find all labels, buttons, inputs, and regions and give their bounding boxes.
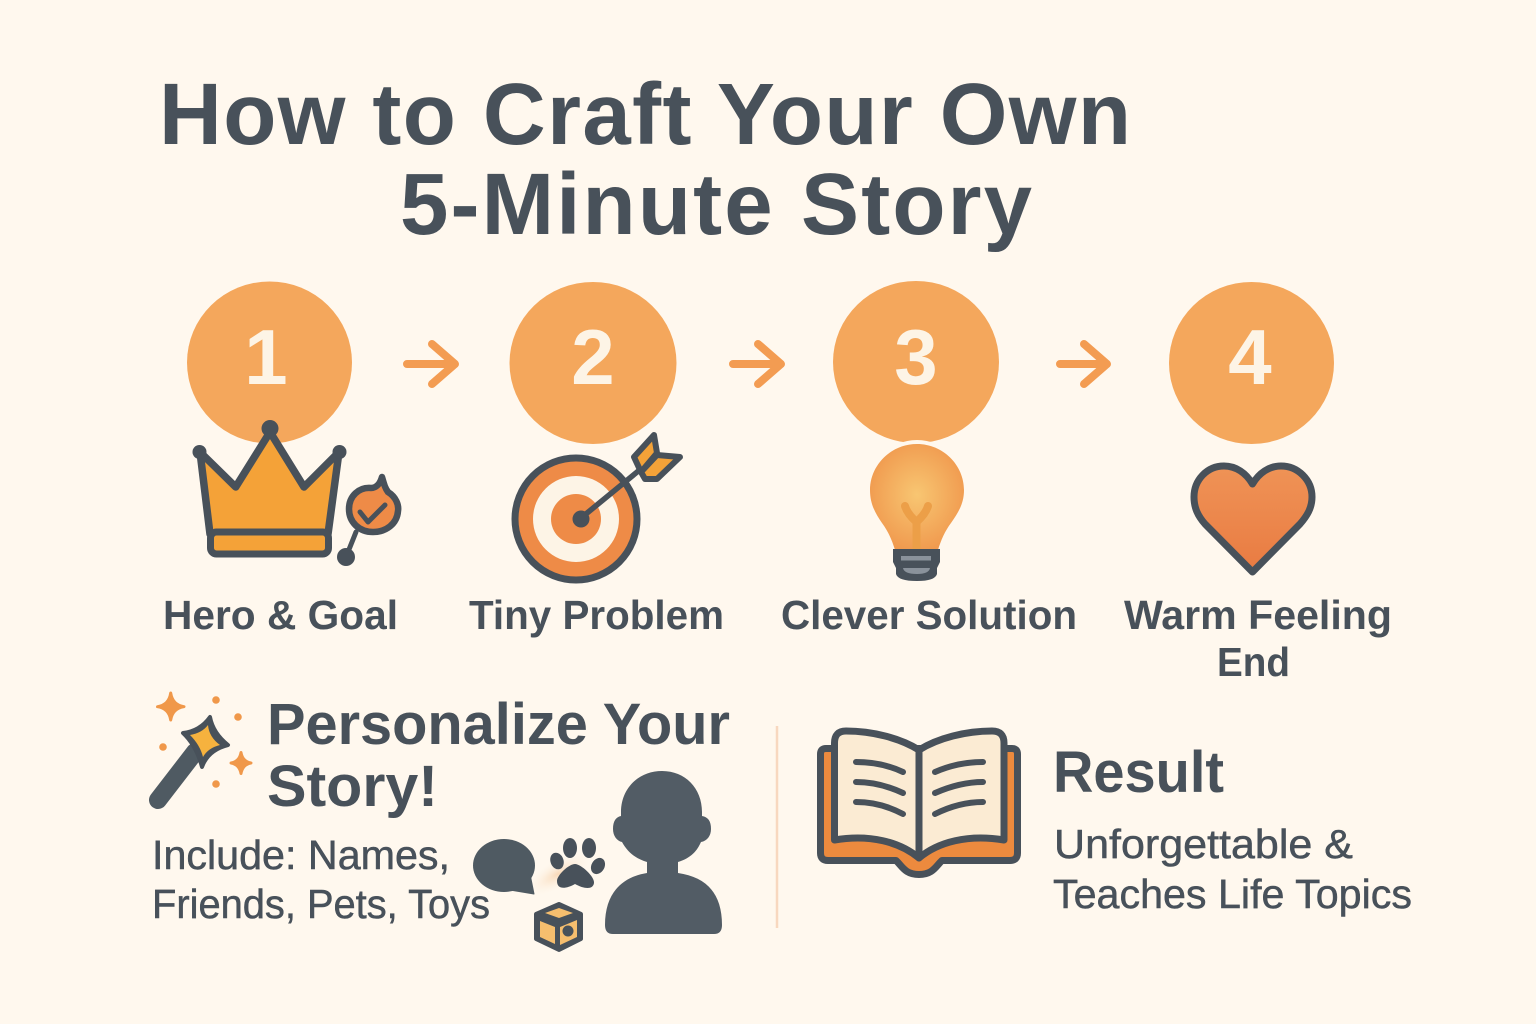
step 1: Hero & Goal bbox=[163, 282, 398, 638]
number circle 4: 4 bbox=[1228, 313, 1272, 401]
arrow 3 to 4 bbox=[1060, 344, 1107, 384]
arrow 1 to 2 bbox=[407, 344, 455, 384]
panel: personalize your story bbox=[152, 692, 730, 950]
step label: Tiny Problem bbox=[469, 592, 724, 638]
arrow 2 to 3 bbox=[733, 344, 781, 384]
icon: target with arrow bbox=[515, 435, 680, 580]
step label: Hero & Goal bbox=[163, 592, 398, 638]
panel: result bbox=[820, 731, 1412, 917]
number circle 1: 1 bbox=[244, 313, 288, 401]
body text: Friends, Pets, Toys bbox=[152, 881, 490, 927]
title: How to Craft Your Own bbox=[159, 66, 1131, 163]
title bbox=[159, 66, 1131, 253]
step label: Warm Feeling bbox=[1124, 592, 1392, 638]
heading: Personalize Your bbox=[267, 692, 730, 757]
number circle 3: 3 bbox=[894, 313, 938, 401]
body text: Unforgettable & bbox=[1054, 821, 1353, 867]
body text: Teaches Life Topics bbox=[1053, 871, 1412, 917]
icon: speech bubble bbox=[473, 839, 535, 894]
icon: paw print bbox=[548, 838, 608, 888]
divider bbox=[776, 726, 778, 928]
icon: open book bbox=[820, 731, 1018, 874]
body text: Include: Names, bbox=[152, 832, 450, 878]
step 4: Warm Feeling End bbox=[1124, 282, 1392, 685]
soft glow behind pet and toy icons bbox=[518, 842, 598, 906]
number circle 1 bbox=[187, 282, 352, 444]
icon: light bulb bbox=[867, 440, 967, 581]
step label: Clever Solution bbox=[781, 592, 1077, 638]
body text bbox=[152, 832, 490, 927]
step label: End bbox=[1217, 639, 1290, 685]
number circle 2: 2 bbox=[571, 313, 615, 401]
heading: Story! bbox=[267, 754, 438, 819]
heading bbox=[267, 692, 730, 819]
number circle 4 bbox=[1169, 282, 1334, 444]
step 2: Tiny Problem bbox=[469, 282, 724, 638]
heading: Result bbox=[1053, 740, 1224, 805]
step label bbox=[1124, 592, 1392, 685]
icon: toy block bbox=[536, 904, 581, 950]
body text bbox=[1053, 821, 1412, 917]
icon: crown with goal badge bbox=[192, 420, 398, 566]
number circle 3 bbox=[833, 281, 999, 443]
icon: magic wand with sparkles bbox=[158, 693, 251, 800]
icon: child silhouette bbox=[605, 771, 722, 934]
step 3: Clever Solution bbox=[781, 281, 1077, 638]
number circle 2 bbox=[510, 282, 676, 444]
title: 5-Minute Story bbox=[400, 156, 1032, 253]
icon: heart bbox=[1194, 466, 1312, 572]
